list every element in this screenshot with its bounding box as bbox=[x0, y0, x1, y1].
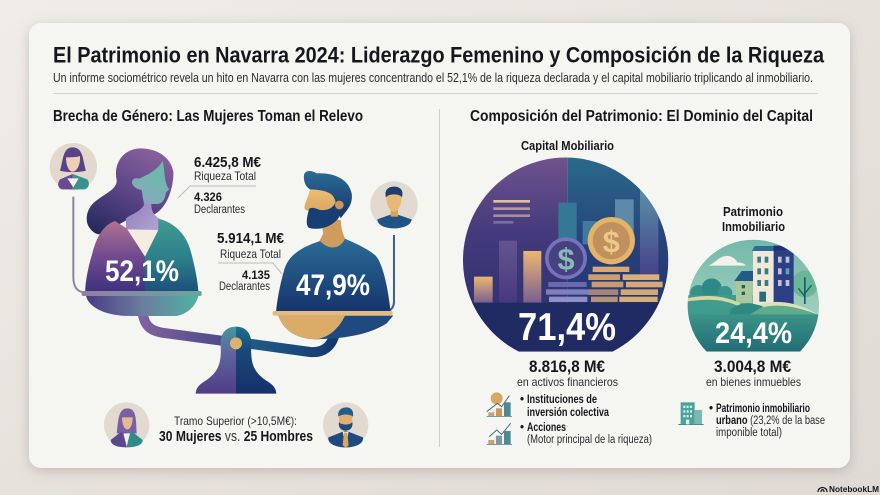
chart circle: real estate bbox=[688, 240, 819, 352]
stats: men: Riqueza Total bbox=[220, 247, 281, 261]
avatar: businesswoman bbox=[104, 402, 149, 448]
scale beam and base bbox=[143, 313, 335, 394]
stats: women: 4.326 bbox=[194, 190, 222, 204]
heading: gender gap: Brecha de Género: Las Mujeres Toman el Relevo bbox=[53, 108, 363, 125]
stat: real estate: 3.004,8 M€ bbox=[714, 357, 791, 376]
stats: men: 5.914,1 M€ bbox=[217, 231, 284, 247]
label: patrimonio inmobiliario: Patrimonio bbox=[723, 205, 783, 219]
stats: men bbox=[217, 231, 284, 293]
panel: gender gap bbox=[50, 108, 418, 448]
list: real estate: • bbox=[709, 403, 713, 415]
percentage: men: 47,9% bbox=[296, 269, 370, 302]
stat: financial assets: 8.816,8 M€ bbox=[529, 357, 605, 376]
stats: women: 6.425,8 M€ bbox=[194, 155, 261, 171]
panel: wealth composition bbox=[460, 108, 830, 446]
list: financial assets: • bbox=[520, 422, 524, 434]
icon: investment funds bbox=[487, 392, 512, 417]
list: real estate: Patrimonio inmobiliario bbox=[716, 403, 810, 415]
stat: financial assets bbox=[517, 357, 618, 389]
logo: NotebookLM: NotebookLM bbox=[829, 484, 879, 494]
stats: women: Riqueza Total bbox=[194, 169, 256, 183]
figure: woman bbox=[73, 148, 202, 316]
list: real estate bbox=[709, 403, 825, 439]
stat: real estate: en bienes inmuebles bbox=[706, 375, 801, 389]
chart circle: financial capital bbox=[463, 158, 668, 352]
list: financial assets: Instituciones de bbox=[527, 394, 597, 406]
icon: buildings bbox=[678, 402, 704, 425]
stats: men: Declarantes bbox=[219, 281, 270, 293]
percentage: real estate: 24,4% bbox=[715, 317, 792, 350]
label: patrimonio inmobiliario bbox=[722, 205, 785, 234]
stats: women bbox=[178, 155, 261, 216]
list: financial assets: • bbox=[520, 394, 524, 406]
figure: man bbox=[273, 171, 394, 339]
text: top bracket: 30 Mujeres vs. 25 Hombres bbox=[159, 429, 313, 445]
percentage: women: 52,1% bbox=[105, 255, 179, 288]
label: capital mobiliario: Capital Mobiliario bbox=[521, 139, 614, 153]
icon: stocks bbox=[487, 423, 512, 445]
list: financial assets bbox=[520, 394, 652, 446]
avatar: woman bbox=[50, 143, 97, 190]
stats: women: Declarantes bbox=[194, 204, 245, 216]
list: financial assets: inversión colectiva bbox=[527, 407, 609, 419]
text: top bracket bbox=[159, 414, 313, 445]
stat: financial assets: en activos financieros bbox=[517, 375, 618, 389]
text: top bracket: Tramo Superior (>10,5M€): bbox=[174, 414, 297, 428]
list: real estate: urbano (23,2% de la base bbox=[716, 415, 825, 427]
chart circle: financial capital: $ bbox=[603, 225, 620, 259]
percentage: capital mobiliario: 71,4% bbox=[518, 306, 616, 349]
avatar: businessman bbox=[323, 402, 368, 448]
list: financial assets: (Motor principal de la riqueza) bbox=[527, 434, 652, 446]
label: patrimonio inmobiliario: Inmobiliario bbox=[722, 220, 785, 234]
stats: men: 4.135 bbox=[242, 268, 270, 282]
avatar: man bbox=[370, 181, 418, 229]
list: real estate: imponible total) bbox=[716, 427, 782, 439]
heading: composition: Composición del Patrimonio: El Dominio del Capital bbox=[470, 108, 813, 125]
list: financial assets: Acciones bbox=[527, 422, 566, 434]
chart circle: financial capital: $ bbox=[557, 242, 575, 276]
stat: real estate bbox=[706, 357, 801, 389]
